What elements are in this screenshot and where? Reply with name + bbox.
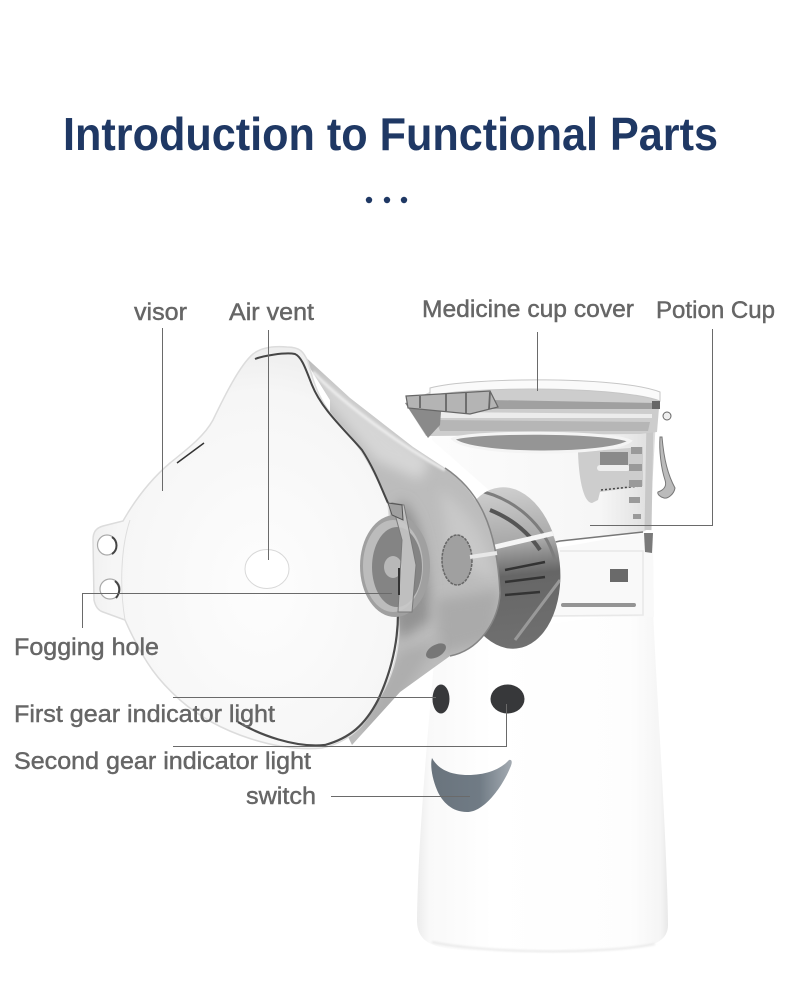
- body collar with window: [548, 533, 654, 617]
- indicator lights: [432, 684, 524, 714]
- air vent hole: [245, 550, 289, 588]
- label: potion cup: Potion Cup: [656, 297, 775, 324]
- mask shell with visor: [93, 347, 399, 749]
- strap holes: [98, 535, 120, 599]
- label: fogging hole: Fogging hole: [14, 634, 159, 661]
- label: medicine cup cover: Medicine cup cover: [422, 296, 634, 323]
- nebulizer head: [476, 487, 560, 649]
- label: air vent: Air vent: [229, 299, 314, 326]
- potion cup: [432, 400, 675, 549]
- label: second gear indicator light: Second gear indicator light: [14, 748, 311, 775]
- medicine cup cover: [405, 380, 671, 452]
- mask inlet ring: [360, 503, 430, 617]
- title dots: [366, 197, 407, 203]
- label: switch: switch: [246, 783, 316, 810]
- label: first gear indicator light: First gear indicator light: [14, 701, 275, 728]
- mask cone: [307, 358, 501, 745]
- title: Introduction to Functional Parts: [63, 108, 718, 160]
- product illustration: nebulizer: [93, 340, 675, 953]
- switch: [431, 758, 512, 812]
- leader lines: [82, 328, 712, 796]
- nebulizer body: [417, 610, 668, 953]
- label: visor: visor: [134, 299, 187, 326]
